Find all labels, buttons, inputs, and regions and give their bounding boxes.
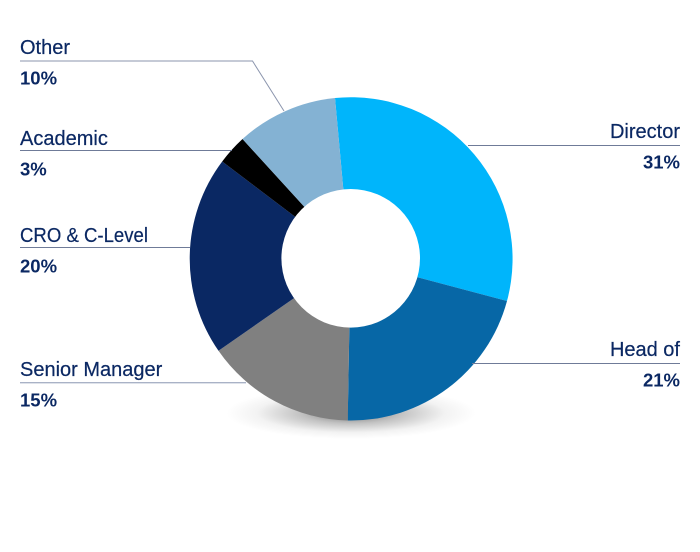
label: Head of 21%: Head of [610, 339, 680, 361]
donut hole [281, 189, 420, 328]
label: Senior Manager 15%: Senior Manager [20, 359, 163, 381]
label: Other 10%: 10% [20, 68, 57, 88]
segment: Other 10% [242, 98, 344, 213]
label: CRO & C-Level 20%: 20% [20, 256, 57, 276]
donut shadow [226, 387, 476, 439]
label: CRO & C-Level 20% [20, 225, 190, 276]
segment: Academic 3% [222, 139, 310, 222]
label: Director 31% [468, 121, 680, 172]
segment: CRO & C-Level 20% [190, 162, 302, 351]
label: Head of 21%: 21% [643, 370, 680, 390]
label: Academic 3%: Academic [20, 128, 108, 150]
label: Other 10%: Other [20, 37, 70, 59]
label: Other 10% [20, 37, 284, 111]
donut chart [190, 97, 513, 421]
label: Director 31%: Director [610, 121, 680, 143]
label: Senior Manager 15%: 15% [20, 390, 57, 410]
label: Academic 3%: 3% [20, 158, 47, 180]
segment: Senior Manager 15% [218, 294, 350, 420]
label: Director 31%: 31% [643, 152, 680, 172]
segment: Head of 21% [348, 275, 507, 421]
label: Academic 3% [20, 128, 232, 180]
label: Head of 21% [472, 339, 680, 390]
label: Senior Manager 15% [20, 359, 246, 410]
segment: Director 31% [335, 97, 513, 301]
label: CRO & C-Level 20%: CRO & C-Level [20, 225, 148, 247]
